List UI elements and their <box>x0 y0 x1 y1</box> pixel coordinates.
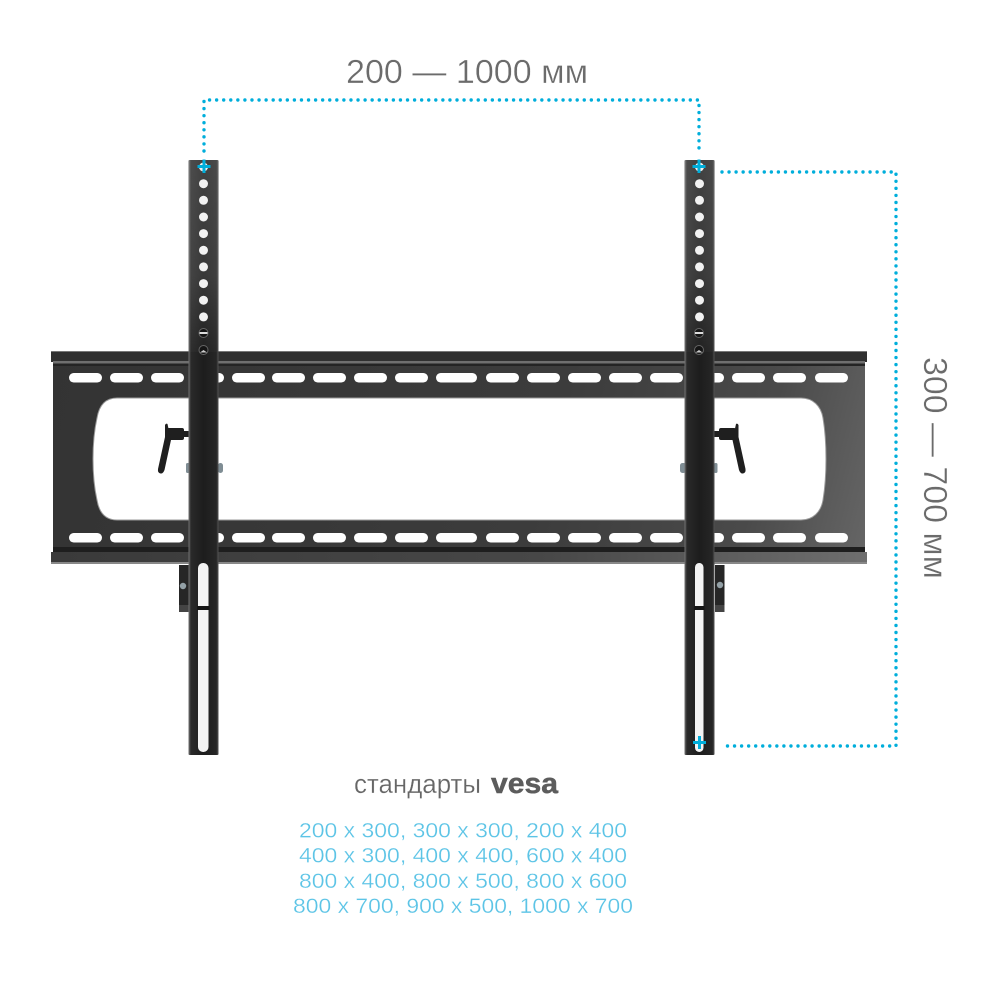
marker: top left cross <box>198 160 210 173</box>
top lip <box>51 351 867 366</box>
left lower clip <box>179 565 189 612</box>
mounting plate <box>51 351 867 564</box>
rail holes <box>695 162 704 321</box>
rail lower slot <box>197 563 210 752</box>
vesa sizes list: 800 x 700, 900 x 500, 1000 x 700 <box>293 895 633 918</box>
bottom lip <box>51 547 867 564</box>
heading: vesa standards <box>354 768 559 800</box>
rail screws <box>199 328 208 354</box>
right centre bolts <box>680 463 718 473</box>
top slots <box>69 373 848 382</box>
height dimension label: 300 — 700 мм <box>917 357 954 579</box>
vertical dimension line <box>721 172 896 746</box>
rail holes <box>199 162 208 321</box>
right lock lever <box>713 424 746 474</box>
horizontal dimension line <box>204 100 699 151</box>
rail screws <box>694 328 704 354</box>
heading: vesa standards: vesa <box>491 768 559 800</box>
right vertical rail <box>684 160 714 755</box>
opening edge highlight <box>93 398 826 520</box>
width dimension label: 200 — 1000 мм <box>346 53 588 90</box>
left lock lever <box>158 424 190 474</box>
vesa sizes list: 400 x 300, 400 x 400, 600 x 400 <box>299 844 627 868</box>
rail lower slot <box>694 563 704 752</box>
marker: bottom right cross <box>693 736 706 749</box>
right lower clip <box>715 565 724 612</box>
vesa sizes list: 800 x 400, 800 x 500, 800 x 600 <box>299 870 627 893</box>
heading: vesa standards: стандарты <box>354 769 481 799</box>
vesa sizes list <box>293 820 633 918</box>
vesa sizes list: 200 x 300, 300 x 300, 200 x 400 <box>299 820 627 842</box>
left vertical rail <box>188 160 218 755</box>
left centre bolts <box>186 463 223 473</box>
bottom slots <box>69 533 848 542</box>
marker: top right cross <box>692 160 706 173</box>
